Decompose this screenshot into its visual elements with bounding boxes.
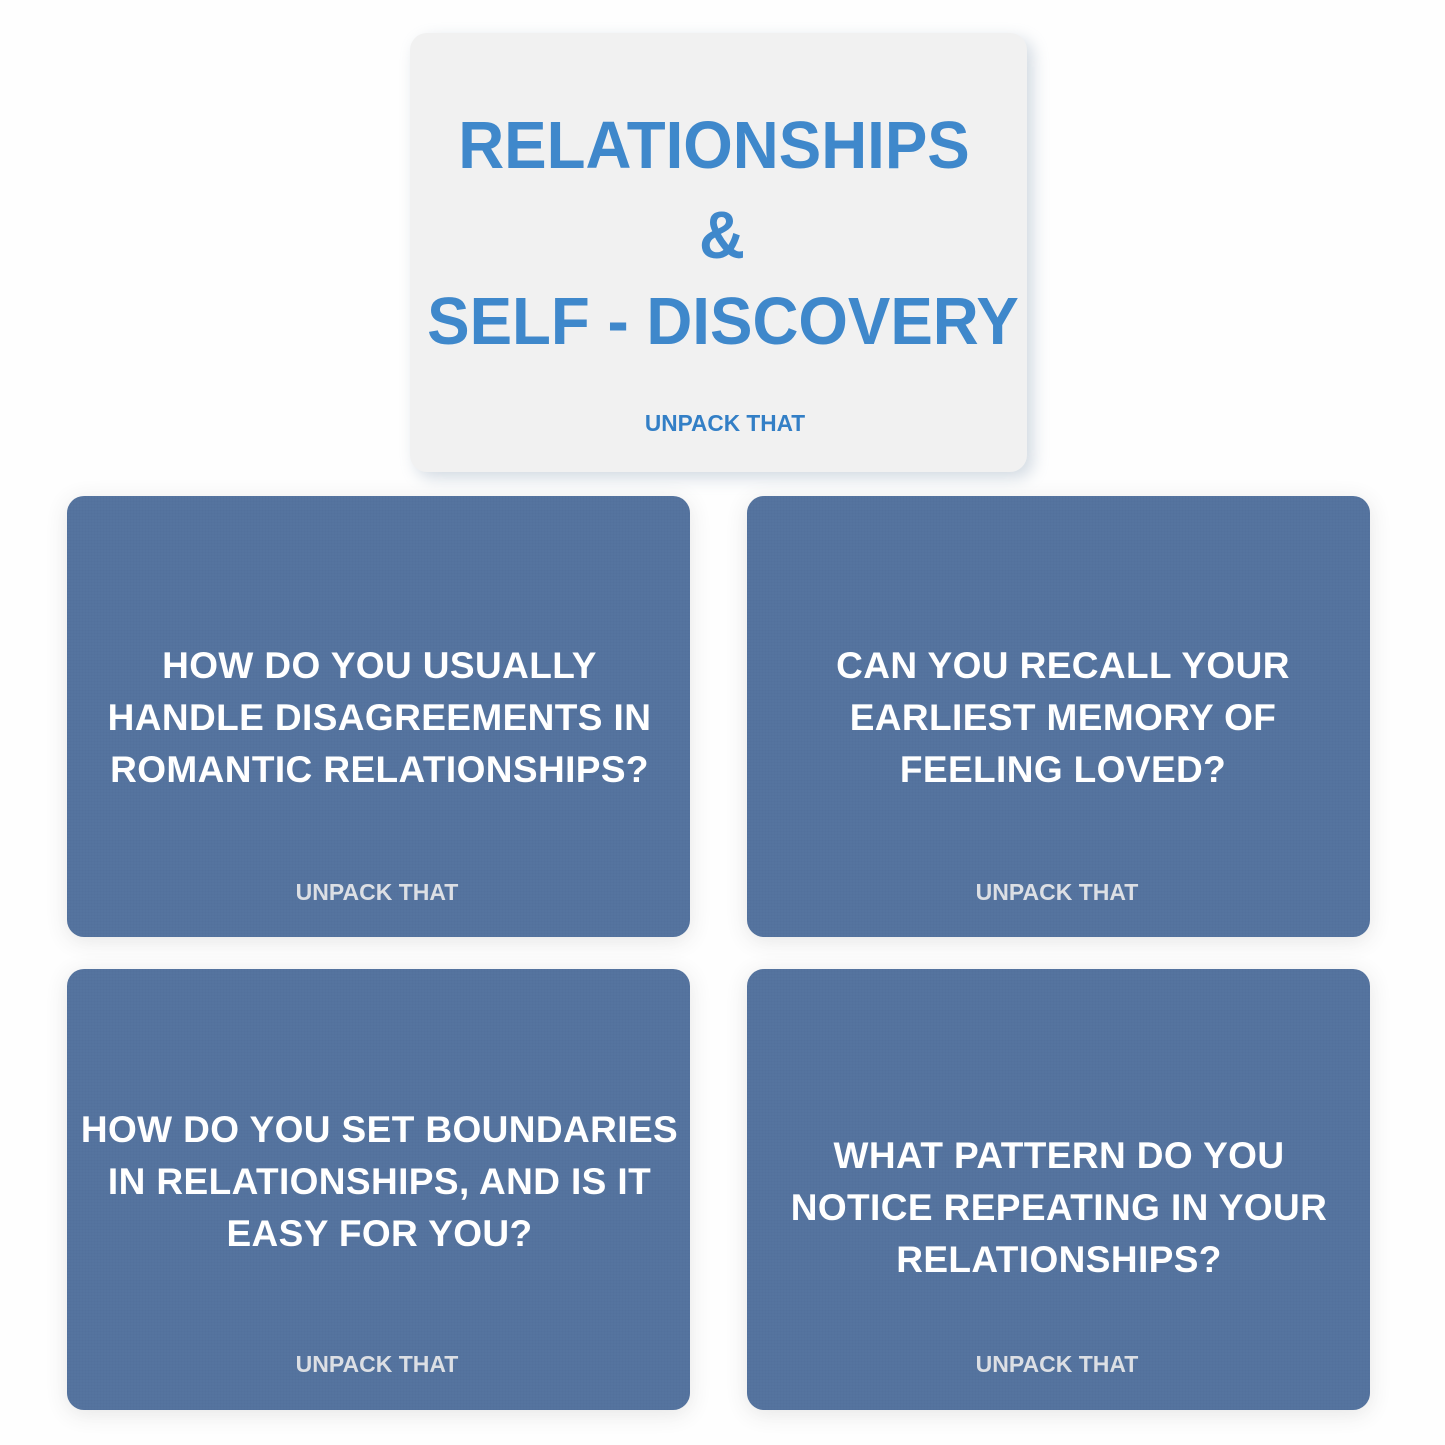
question text: HOW DO YOU USUALLY (162, 645, 597, 686)
brand label: UNPACK THAT (976, 879, 1138, 905)
question text: CAN YOU RECALL YOUR (836, 645, 1290, 686)
question text: RELATIONSHIPS? (896, 1239, 1222, 1280)
question text: IN RELATIONSHIPS, AND IS IT (108, 1161, 651, 1202)
heading: ampersand: & (699, 199, 745, 273)
panel: question card 2 (747, 496, 1370, 937)
brand label: UNPACK THAT (976, 1351, 1138, 1377)
question text: EARLIEST MEMORY OF (850, 697, 1276, 738)
panel: question card 1 (67, 496, 690, 937)
question text: HOW DO YOU SET BOUNDARIES (81, 1109, 678, 1150)
question text (81, 1109, 678, 1254)
question text: FEELING LOVED? (900, 749, 1226, 790)
heading: relationships: RELATIONSHIPS (458, 109, 970, 183)
question text: EASY FOR YOU? (226, 1213, 533, 1254)
question text: ROMANTIC RELATIONSHIPS? (110, 749, 649, 790)
brand label: UNPACK THAT (645, 410, 805, 436)
panel: question card 4 (747, 969, 1370, 1410)
panel: question card 3 (67, 969, 690, 1410)
brand label: UNPACK THAT (296, 1351, 458, 1377)
question text: WHAT PATTERN DO YOU (834, 1135, 1284, 1176)
question text: HANDLE DISAGREEMENTS IN (108, 697, 651, 738)
question text: NOTICE REPEATING IN YOUR (791, 1187, 1327, 1228)
heading: self-discovery: SELF - DISCOVERY (427, 285, 1019, 359)
question text (836, 645, 1290, 790)
question text (791, 1135, 1327, 1280)
brand label: UNPACK THAT (296, 879, 458, 905)
question text (108, 645, 651, 790)
panel: cover card (410, 33, 1027, 472)
